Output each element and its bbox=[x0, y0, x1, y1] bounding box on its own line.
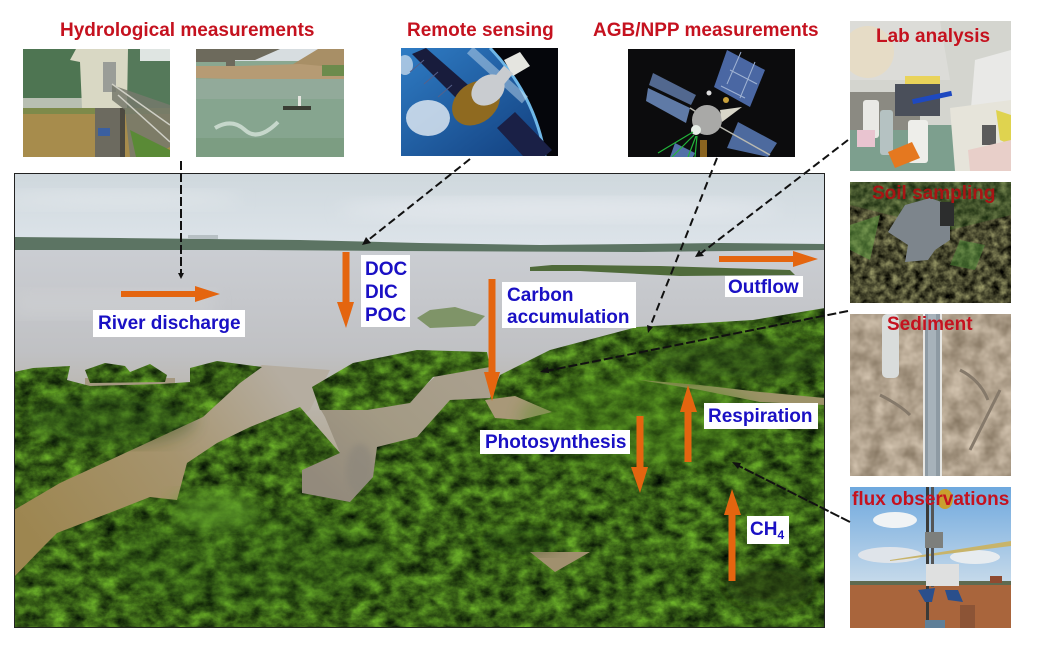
label: Carbon accumulation: Carbon bbox=[507, 285, 574, 306]
small islands bbox=[417, 307, 485, 328]
arrow: outflow bbox=[719, 251, 818, 267]
label: CH4: CH bbox=[750, 519, 777, 540]
label: DOC DIC POC: DOC bbox=[365, 259, 408, 280]
dashed connector: AGB/NPP to forest bbox=[647, 158, 717, 333]
label: River discharge: River discharge bbox=[98, 313, 241, 334]
dashed connector: lab analysis to water bbox=[695, 140, 848, 257]
photo: river survey boat bbox=[196, 49, 344, 157]
forest shading bbox=[117, 519, 388, 609]
tidal flats bbox=[485, 396, 552, 420]
brown river channel bbox=[15, 365, 330, 576]
label: Outflow: Outflow bbox=[728, 277, 799, 298]
label: Carbon accumulation: accumulation bbox=[507, 307, 629, 328]
heading: Soil sampling: Soil sampling bbox=[872, 183, 996, 204]
arrow: CH4 bbox=[724, 489, 741, 581]
label: DOC DIC POC bbox=[361, 255, 410, 327]
tidal creek bbox=[298, 365, 492, 505]
heading: flux observations: flux observations bbox=[852, 489, 1009, 510]
arrow: carbon accumulation bbox=[484, 279, 500, 401]
photo: lab analysis bench bbox=[842, 21, 1011, 171]
arrow: photosynthesis bbox=[631, 416, 648, 493]
heading: AGB/NPP measurements: AGB/NPP measurements bbox=[593, 20, 819, 41]
arrow: respiration bbox=[680, 385, 697, 462]
photo: sediment core bbox=[850, 314, 1011, 476]
photo: soil sampling bbox=[850, 182, 1011, 303]
label: CH4: 4 bbox=[777, 528, 784, 542]
label: DOC DIC POC: POC bbox=[365, 305, 406, 326]
mangrove canopy bbox=[14, 308, 825, 628]
panel frame bbox=[14, 174, 824, 628]
heading: Hydrological measurements: Hydrological measurements bbox=[60, 20, 314, 41]
dashed connector: hydrological to river bbox=[178, 161, 184, 279]
label: CH4 bbox=[747, 516, 789, 544]
panel: mangrove estuary aerial scene bbox=[0, 173, 830, 628]
heading: Remote sensing: Remote sensing bbox=[407, 20, 554, 41]
label: Carbon accumulation bbox=[502, 282, 636, 328]
heading: Lab analysis: Lab analysis bbox=[876, 26, 990, 47]
photo: satellite over Earth bbox=[397, 48, 558, 156]
arrow: DOC DIC POC bbox=[337, 252, 354, 328]
heading: Sediment: Sediment bbox=[887, 314, 973, 335]
photo: flux tower bbox=[850, 487, 1011, 628]
label: DOC DIC POC: DIC bbox=[365, 282, 398, 303]
photo: gauging station tower bbox=[23, 49, 170, 157]
photo: lidar satellite bbox=[628, 49, 795, 157]
dashed connector: flux tower to forest bbox=[732, 462, 850, 522]
dashed connector: sediment to forest bbox=[540, 311, 848, 373]
dashed connector: remote sensing to water bbox=[362, 159, 470, 245]
arrow: river discharge bbox=[121, 286, 220, 302]
label: Photosynthesis: Photosynthesis bbox=[485, 432, 626, 453]
mudflat behind islets bbox=[85, 378, 175, 386]
label: Respiration: Respiration bbox=[708, 406, 813, 427]
